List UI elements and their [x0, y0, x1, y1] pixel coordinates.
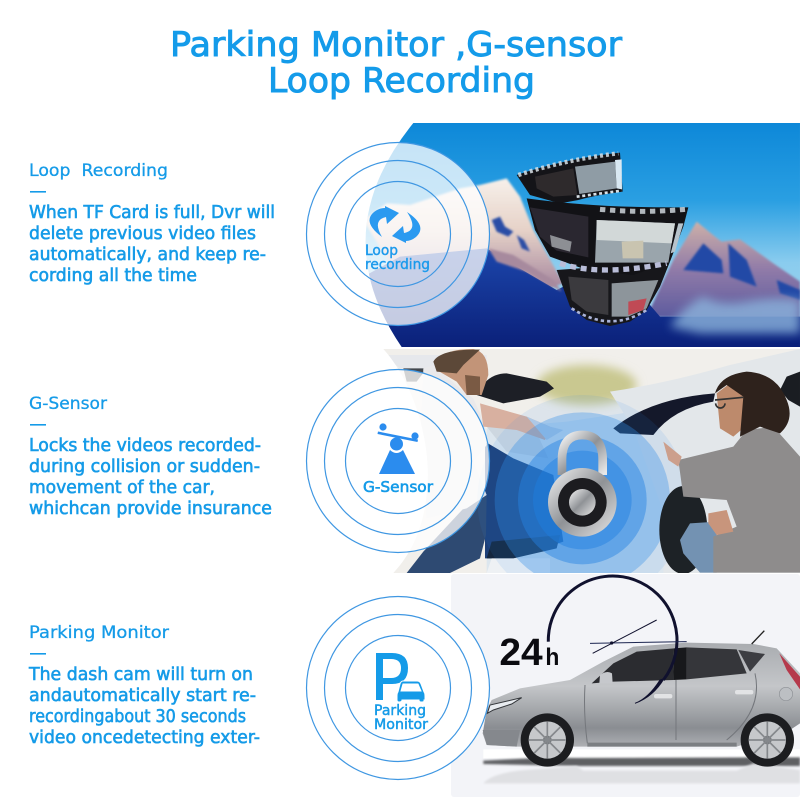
panel: g-sensor text: G-Sensor: [29, 394, 107, 414]
wheels: [521, 713, 794, 767]
icon: P with car: [376, 653, 425, 702]
panel: g-sensor text: movement of the car,: [29, 478, 215, 498]
icon: parking rings: [306, 596, 490, 780]
title: [170, 25, 622, 100]
panel: parking monitor text: The dash cam will turn on: [28, 665, 253, 685]
icon: parking rings: Parking: [374, 703, 426, 719]
icon: loop recording rings: Loop: [365, 243, 398, 259]
title: Parking Monitor ,G-sensor: [170, 25, 622, 64]
icon: loop recording rings: [306, 142, 490, 326]
man: [407, 349, 563, 573]
title: Loop Recording: [268, 61, 535, 100]
woman: [659, 372, 800, 574]
panel: parking monitor text: Parking Monitor: [29, 623, 169, 643]
panel: parking monitor text: video oncedetecting exter-: [29, 728, 260, 748]
24h clock: [499, 576, 687, 703]
panel: loop recording text: automatically, and keep re-: [29, 245, 266, 265]
blue signal rings: [478, 395, 682, 573]
photo: collision scene with lock: [384, 349, 800, 573]
panel: g-sensor text: Locks the videos recorded-: [29, 436, 261, 456]
icon: loop arrows: [370, 206, 420, 243]
panel: parking monitor text: recordingabout 30 seconds: [29, 707, 246, 727]
icon: padlock: [548, 435, 617, 537]
panel: loop recording text: When TF Card is full, Dvr will: [29, 203, 275, 223]
icon: g-sensor rings: G-Sensor: [363, 478, 434, 496]
photo: mountains with film reel: [366, 123, 800, 347]
panel: loop recording text: [29, 161, 275, 286]
icon: parking rings: Monitor: [374, 717, 428, 733]
film reel: [517, 153, 688, 326]
panel: g-sensor text: [29, 394, 272, 519]
panel: loop recording text: Loop Recording: [29, 161, 168, 181]
background: parking scene panel: [451, 574, 800, 797]
24h clock: h: [545, 644, 559, 671]
icon: seesaw balance: [378, 423, 419, 474]
24h clock: 24: [499, 631, 543, 674]
panel: loop recording text: delete previous video files: [29, 224, 256, 244]
panel: g-sensor text: whichcan provide insurance: [29, 499, 272, 519]
panel: parking monitor text: andautomatically start re-: [29, 686, 256, 706]
icon: loop recording rings: recording: [365, 257, 430, 273]
panel: loop recording text: cording all the time: [29, 266, 197, 286]
panel: g-sensor text: during collision or sudden-: [29, 457, 260, 477]
photo: parked car: [483, 631, 800, 783]
icon: g-sensor rings: [306, 370, 490, 552]
panel: parking monitor text: [28, 623, 260, 748]
